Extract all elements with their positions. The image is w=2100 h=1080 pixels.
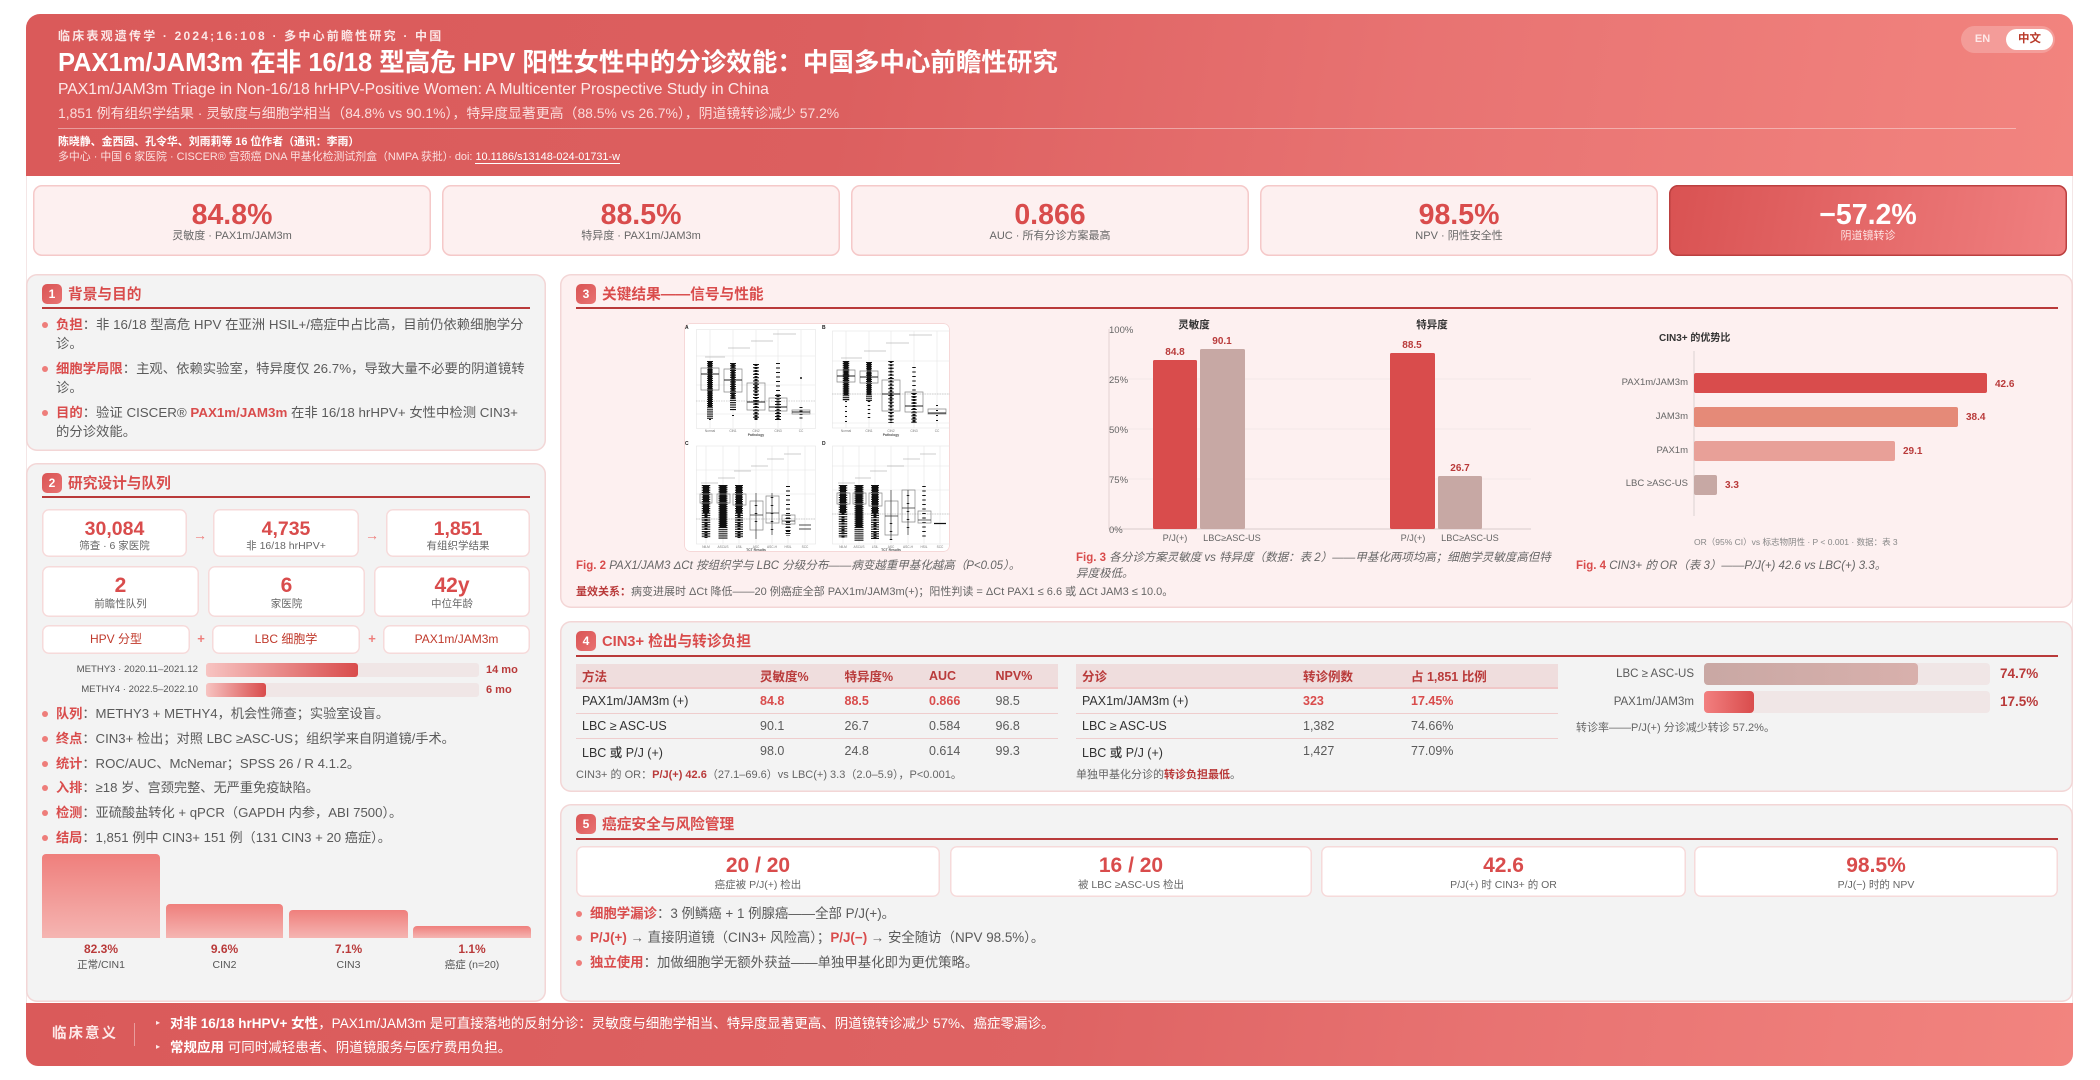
B dots [844, 361, 848, 395]
table: performance: NPV% [996, 668, 1032, 682]
table: performance: 0.584 [929, 719, 960, 733]
heading: 癌症安全与风险管理 [602, 817, 734, 833]
timeline: methy4: 6 mo [486, 684, 512, 696]
table: referrals: 转诊例数 [1303, 670, 1353, 684]
kpi: colposcopy referral [1669, 185, 2067, 256]
C dots [703, 485, 709, 513]
bar: cin2 [166, 904, 283, 938]
values and labels: 82.3% [84, 942, 118, 956]
kpi: auc: AUC · 所有分诊方案最高 [990, 230, 1110, 242]
bullet: burden [42, 317, 524, 351]
kpi: auc: 0.866 [1014, 199, 1086, 231]
D dots [840, 485, 846, 513]
header divider [58, 128, 2016, 129]
table: performance: 0.614 [929, 744, 960, 758]
figure 2: boxplots: ASCUS [718, 545, 728, 549]
values and labels: 7.1% [335, 942, 362, 956]
chart: histology distribution [42, 854, 531, 971]
badge 5: 5 [583, 817, 589, 831]
kpi: auc [851, 185, 1249, 256]
stat: cancers detected by lbc: 16 / 20 [1099, 854, 1163, 877]
bullet: cytology miss: 细胞学漏诊：3 例鳞癌 + 1 例腺癌——全部 P/J(+)。 [590, 906, 895, 921]
table: performance: 0.866 [929, 694, 960, 708]
bar values: 84.8 [1165, 347, 1185, 358]
table: referrals: 1,427 [1303, 744, 1334, 758]
C boxes [700, 494, 795, 530]
figure 2: boxplots: ASC [888, 545, 895, 549]
stat: hospitals: 6 [281, 574, 292, 597]
figure 3: sensitivity vs specificity chart: 25% [1109, 375, 1129, 386]
figure 2: boxplots: ASC-H [767, 545, 778, 549]
bars [1694, 373, 1987, 495]
table: performance: PAX1m/JAM3m (+) [582, 694, 688, 708]
figure 2: boxplots: TCT Results [881, 548, 901, 552]
row labels: PAX1m [1656, 445, 1688, 456]
values and labels: 9.6% [211, 942, 238, 956]
table: performance: 96.8 [996, 719, 1020, 733]
badge 1: 1 [49, 287, 55, 301]
flow: histology: 有组织学结果 [426, 540, 490, 552]
stat: cancers detected by p/j: 20 / 20 [726, 854, 790, 877]
stat: cohorts [42, 566, 199, 617]
table: referrals [1076, 664, 1558, 760]
bullet: aim: 的分诊效能。 [56, 424, 136, 439]
figure 4: odds ratio chart: CIN3+ 的优势比 [1659, 331, 1730, 344]
kpi: npv: 98.5% [1419, 199, 1499, 231]
figure 2: boxplots: CIN2 [752, 429, 760, 433]
bullet: aim [42, 405, 518, 439]
figure 4: odds ratio chart: OR（95% CI）vs 标志物阴性 · P < 0.001 · 数据：表 3 [1694, 537, 1898, 547]
arrow: → [193, 527, 207, 543]
figure 2: boxplots: LSIL [872, 545, 879, 549]
badge 4 [576, 631, 596, 651]
test: methylation: PAX1m/JAM3m [415, 632, 498, 646]
implication line 2: 常规应用 可同时减轻患者、阴道镜服务与医疗费用负担。 [170, 1040, 511, 1055]
bullet: assay: 检测：亚硫酸盐转化 + qPCR（GAPDH 内参，ABI 7500）。 [56, 805, 402, 820]
axis labels: P/J(+) [1163, 533, 1187, 543]
arrow: → [365, 527, 379, 543]
flow: non 16/18: 4,735 [262, 518, 310, 540]
bar values: 3.3 [1725, 480, 1739, 491]
table: performance: 99.3 [996, 744, 1020, 758]
bar values: 38.4 [1966, 412, 1986, 423]
figure 2: boxplots: ASC [753, 545, 760, 549]
stat: odds ratio [1321, 846, 1686, 897]
plus: + [368, 631, 376, 646]
flow: non 16/18: 非 16/18 hrHPV+ [246, 540, 326, 552]
bar values: 88.5 [1402, 340, 1422, 351]
summary line: 1,851 例有组织学结果 · 灵敏度与细胞学相当（84.8% vs 90.1%），特异度显著更高（88.5% vs 26.7%），阴道镜转诊减少 57.2% [58, 105, 839, 121]
figure 2: boxplots: D [822, 441, 826, 447]
stat: hospitals [208, 566, 365, 617]
panel: study design and cohort [26, 463, 546, 1002]
stat: median age: 中位年龄 [431, 598, 473, 610]
kpi: npv: NPV · 阴性安全性 [1415, 230, 1503, 242]
figure 2: boxplots: CIN3 [774, 429, 782, 433]
bar: normal/cin1 [42, 854, 160, 938]
bar values: 26.7 [1450, 463, 1470, 474]
kpi: specificity [442, 185, 840, 256]
A boxes [701, 368, 810, 414]
table: referrals: LBC 或 P/J (+) [1082, 746, 1163, 760]
group titles: 特异度 [1416, 318, 1448, 331]
kpi: colposcopy referral: −57.2% [1819, 199, 1917, 231]
row labels: JAM3m [1656, 411, 1688, 422]
table: performance: 98.0 [760, 744, 784, 758]
referral bar: lbc: LBC ≥ ASC-US [1616, 668, 1694, 680]
figure 2: boxplots: HSIL [920, 545, 928, 549]
figure 2: boxplots: CIN2 [887, 429, 895, 433]
figure 3: sensitivity vs specificity chart: 75% [1109, 475, 1129, 486]
table: referrals: 17.45% [1411, 694, 1453, 708]
badge 2 [42, 473, 62, 493]
axis labels [1163, 533, 1499, 543]
axis labels: LBC≥ASC-US [1203, 533, 1261, 543]
referral bar: methylation [1614, 691, 2038, 713]
test: lbc: LBC 细胞学 [255, 632, 317, 646]
kpi: sensitivity [33, 185, 431, 256]
figure 2: boxplots: C [685, 441, 689, 447]
table: performance: 84.8 [760, 694, 784, 708]
stat: npv [1694, 846, 2058, 897]
referral bar: methylation: PAX1m/JAM3m [1614, 696, 1694, 708]
flow: histology [386, 509, 530, 557]
footer: clinical implication [26, 1003, 2073, 1066]
D boxes [837, 490, 931, 535]
stat: cancers detected by lbc [950, 846, 1312, 897]
figure 2: boxplots: CIN1 [729, 429, 737, 433]
figure 2: boxplots: ASCUS [854, 545, 864, 549]
stat: cancers detected by p/j [576, 846, 940, 897]
footer label: 临床意义 [52, 1026, 118, 1042]
group titles: 灵敏度 [1178, 318, 1210, 331]
panel: detection and referral burden [560, 621, 2073, 792]
bar values [1725, 379, 2015, 491]
table: performance: 90.1 [760, 719, 784, 733]
table: performance: 特异度% [844, 670, 893, 684]
bullet: management: P/J(+) → 直接阴道镜（CIN3+ 风险高）；P/J(−) → 安全随访（NPV 98.5%）。 [590, 930, 1044, 945]
bullet: endpoint: 终点：CIN3+ 检出；对照 LBC ≥ASC-US；组织学来自阴道镜/手术。 [56, 731, 455, 746]
axis labels: LBC≥ASC-US [1441, 533, 1499, 543]
figure 2: boxplots: TCT Results [746, 548, 766, 552]
group titles [1178, 318, 1448, 331]
test: hpv: HPV 分型 [90, 632, 142, 646]
row labels: LBC ≥ASC-US [1626, 478, 1688, 489]
badge 3: 3 [583, 287, 589, 301]
figure 2: boxplots: Normal [705, 429, 715, 433]
figure 2: boxplots: SCC [802, 545, 809, 549]
bullet: cytology limits [42, 361, 525, 395]
figure 2: boxplots: Pathology [883, 433, 899, 437]
kpi: npv [1260, 185, 1658, 256]
bullet: standalone use: 独立使用：加做细胞学无额外获益——单独甲基化即为更优策略。 [590, 955, 978, 970]
figure 2: boxplots [684, 323, 950, 552]
figure 2: boxplots: SCC [937, 545, 944, 549]
table: referrals: 323 [1303, 694, 1324, 708]
implication line 1: 对非 16/18 hrHPV+ 女性，PAX1m/JAM3m 是可直接落地的反射分诊：灵敏度与细胞学相当、特异度显著更高、阴道镜转诊减少 57%、癌症零漏诊。 [170, 1016, 1054, 1031]
stat: odds ratio: 42.6 [1483, 854, 1524, 877]
figure 2: boxplots: CIN3 [910, 429, 918, 433]
values and labels [77, 942, 499, 971]
bar values [1165, 336, 1470, 474]
figure 3: sensitivity vs specificity chart [1108, 318, 1531, 543]
test: methylation [383, 625, 530, 654]
table: referrals: 74.66% [1411, 719, 1453, 733]
figure 2: boxplots: Pathology [748, 433, 764, 437]
figure 2: boxplots: A [685, 325, 689, 331]
bullet: inclusion: 入排：≥18 岁、宫颈完整、无严重免疫缺陷。 [56, 780, 319, 795]
table: referrals: 77.09% [1411, 744, 1453, 758]
timeline: methy3: 14 mo [486, 664, 518, 676]
referral bar: methylation: 17.5% [2000, 694, 2038, 709]
figure 3 caption: 异度极低。 [1076, 568, 1134, 580]
timeline: methy3: METHY3 · 2020.11–2021.12 [77, 664, 198, 675]
bullet: cytology limits: 诊。 [56, 380, 83, 395]
plus: + [197, 631, 205, 646]
test: lbc [212, 625, 360, 654]
table: performance: 24.8 [844, 744, 869, 758]
table: performance: LBC 或 P/J (+) [582, 746, 663, 760]
heading: 研究设计与队列 [68, 476, 171, 492]
stat: cohorts: 前瞻性队列 [94, 598, 147, 610]
figure 2: boxplots: Normal [841, 429, 851, 433]
language toggle: EN [1975, 33, 1990, 45]
B boxes [837, 370, 946, 414]
bar values: 29.1 [1903, 446, 1923, 457]
figure 2 caption: Fig. 2 PAX1/JAM3 ΔCt 按组织学与 LBC 分级分布——病变越重甲基化越高（P<0.05）。 [576, 560, 1020, 572]
figure 3 caption [1076, 551, 1552, 580]
figure 3: sensitivity vs specificity chart: 0% [1109, 525, 1123, 536]
stat: npv: 98.5% [1846, 854, 1906, 877]
language toggle: 中文 [2018, 33, 2041, 45]
english subtitle: PAX1m/JAM3m Triage in Non-16/18 hrHPV-Positive Women: A Multicenter Prospective Study in China [58, 81, 769, 98]
flow: histology: 1,851 [434, 518, 482, 540]
badge 1 [42, 284, 62, 304]
heading: 背景与目的 [68, 287, 141, 303]
panel: key results [560, 274, 2073, 608]
values and labels: 正常/CIN1 [77, 959, 125, 971]
odds ratio note: CIN3+ 的 OR：P/J(+) 42.6（27.1–69.6）vs LBC(+) 3.3（2.0–5.9），P<0.001。 [576, 769, 962, 781]
bullet: burden: 诊。 [56, 336, 83, 351]
heading: 关键结果——信号与性能 [602, 287, 764, 303]
bar values: 90.1 [1212, 336, 1232, 347]
panel: background and aims [26, 274, 546, 451]
row labels [1622, 377, 1688, 489]
kpi: specificity: 88.5% [601, 199, 681, 231]
table: referrals: 分诊 [1082, 670, 1107, 684]
table: performance: LBC ≥ ASC-US [582, 719, 667, 733]
implication line 2: ▸ [156, 1042, 160, 1051]
figure 3: sensitivity vs specificity chart: 50% [1109, 425, 1129, 436]
badge 5 [576, 814, 596, 834]
referral bar: lbc [1616, 663, 2038, 685]
figure 4: odds ratio chart [1622, 331, 2015, 547]
figure 3: sensitivity vs specificity chart: 100% [1109, 325, 1134, 336]
figure 2: boxplots: NILM [839, 545, 847, 549]
flow: screened: 30,084 [85, 518, 144, 540]
authors: 陈晓静、金西园、孔令华、刘雨莉等 16 位作者（通讯：李雨） [58, 136, 359, 148]
bullet: statistics: 统计：ROC/AUC、McNemar；SPSS 26 / R 4.1.2。 [56, 756, 360, 771]
badge 4: 4 [583, 634, 589, 648]
table: referrals: 1,382 [1303, 719, 1334, 733]
figure 2: boxplots: CIN1 [865, 429, 873, 433]
flow: screened [42, 509, 187, 557]
bar values: 42.6 [1995, 379, 2015, 390]
figure 2: boxplots: B [822, 325, 826, 331]
stat: hospitals: 家医院 [271, 598, 302, 610]
page frame [26, 170, 2073, 1010]
stat: odds ratio: P/J(+) 时 CIN3+ 的 OR [1450, 879, 1557, 891]
flow: screened: 筛查 · 6 家医院 [79, 540, 150, 552]
bar: cin3 [289, 910, 408, 938]
figure 2: boxplots: CC [935, 429, 940, 433]
bullet: cohort: 队列：METHY3 + METHY4，机会性筛查；实验室设盲。 [56, 706, 389, 721]
table: performance: 98.5 [996, 694, 1020, 708]
study details and doi: 多中心 · 中国 6 家医院 · CISCER® 宫颈癌 DNA 甲基化检测试剂盒（NMPA 获批）· doi: 10.1186/s13148-024-01731-w [58, 151, 620, 163]
figure 2: boxplots: ASC-H [903, 545, 914, 549]
figure 2: boxplots: CC [799, 429, 804, 433]
timeline: methy3 [77, 663, 518, 677]
heading: CIN3+ 检出与转诊负担 [602, 634, 751, 650]
figure 3 caption: Fig. 3 各分诊方案灵敏度 vs 特异度（数据：表 2）——甲基化两项均高；细胞学灵敏度高但特 [1076, 552, 1551, 564]
panel: cancer safety and risk management [560, 804, 2073, 1002]
main title: PAX1m/JAM3m 在非 16/18 型高危 HPV 阳性女性中的分诊效能：中国多中心前瞻性研究 [58, 49, 1058, 77]
flow: non 16/18 [213, 509, 359, 557]
bar: cancer [413, 926, 531, 938]
figure 2: boxplots: HSIL [784, 545, 792, 549]
table: referrals: 占 1,851 比例 [1411, 670, 1487, 684]
stat: cancers detected by lbc: 被 LBC ≥ASC-US 检出 [1078, 879, 1184, 891]
row labels: PAX1m/JAM3m [1622, 377, 1688, 388]
kpi: colposcopy referral: 阴道镜转诊 [1840, 230, 1896, 242]
table: performance: 方法 [582, 670, 607, 684]
values and labels: 1.1% [458, 942, 486, 956]
figure 4 caption: Fig. 4 CIN3+ 的 OR（表 3）——P/J(+) 42.6 vs LBC(+) 3.3。 [1576, 560, 1886, 572]
referral note: 单独甲基化分诊的转诊负担最低。 [1076, 769, 1241, 781]
badge 2: 2 [49, 476, 55, 490]
stat: cancers detected by p/j: 癌症被 P/J(+) 检出 [715, 879, 801, 891]
dose-response note: 量效关系：病变进展时 ΔCt 降低——20 例癌症全部 PAX1m/JAM3m(+)；阳性判读 = ΔCt PAX1 ≤ 6.6 或 ΔCt JAM3 ≤ 10.0。 [576, 586, 1173, 598]
table: performance: 26.7 [844, 719, 869, 733]
referral rate note: 转诊率——P/J(+) 分诊减少转诊 57.2%。 [1576, 722, 1775, 734]
bullet: cytology limits: 细胞学局限：主观、依赖实验室，特异度仅 26.7%，导致大量不必要的阴道镜转 [56, 361, 525, 376]
bullet: outcome: 结局：1,851 例中 CIN3+ 151 例（131 CIN3 + 20 癌症）。 [56, 830, 391, 845]
journal eyebrow: 临床表观遗传学 · 2024;16:108 · 多中心前瞻性研究 · 中国 [58, 29, 443, 43]
values and labels: CIN2 [213, 959, 236, 971]
stat: median age [374, 566, 530, 617]
language toggle [1961, 26, 2055, 53]
kpi: sensitivity: 灵敏度 · PAX1m/JAM3m [172, 230, 292, 242]
values and labels: 癌症 (n=20) [445, 959, 499, 971]
test: hpv [42, 625, 190, 654]
bullet: aim: 目的：验证 CISCER® PAX1m/JAM3m 在非 16/18 hrHPV+ 女性中检测 CIN3+ [56, 405, 518, 420]
table: referrals: LBC ≥ ASC-US [1082, 719, 1167, 733]
table: performance: 灵敏度% [760, 670, 809, 684]
kpi: specificity: 特异度 · PAX1m/JAM3m [581, 230, 701, 242]
table: performance: AUC [929, 668, 956, 682]
values and labels: CIN3 [337, 959, 360, 971]
A dots [708, 361, 712, 407]
bars [1153, 349, 1482, 529]
badge 3 [576, 284, 596, 304]
figure 2: boxplots: LSIL [736, 545, 743, 549]
bullet: burden: 负担：非 16/18 型高危 HPV 在亚洲 HSIL+/癌症中占比高，目前仍依赖细胞学分 [56, 317, 524, 332]
table: performance: 88.5 [844, 694, 869, 708]
timeline: methy4 [81, 683, 512, 697]
table: performance [576, 664, 1058, 760]
stat: cohorts: 2 [115, 574, 126, 597]
axis labels: P/J(+) [1401, 533, 1425, 543]
stat: median age: 42y [434, 574, 470, 597]
figure 2: boxplots: NILM [702, 545, 710, 549]
stat: npv: P/J(−) 时的 NPV [1838, 879, 1914, 891]
table: referrals: PAX1m/JAM3m (+) [1082, 694, 1188, 708]
kpi: sensitivity: 84.8% [192, 199, 272, 231]
implication line 1: ▸ [156, 1018, 160, 1027]
timeline: methy4: METHY4 · 2022.5–2022.10 [81, 684, 198, 695]
header banner [26, 14, 2073, 176]
referral bar: lbc: 74.7% [2000, 666, 2038, 681]
